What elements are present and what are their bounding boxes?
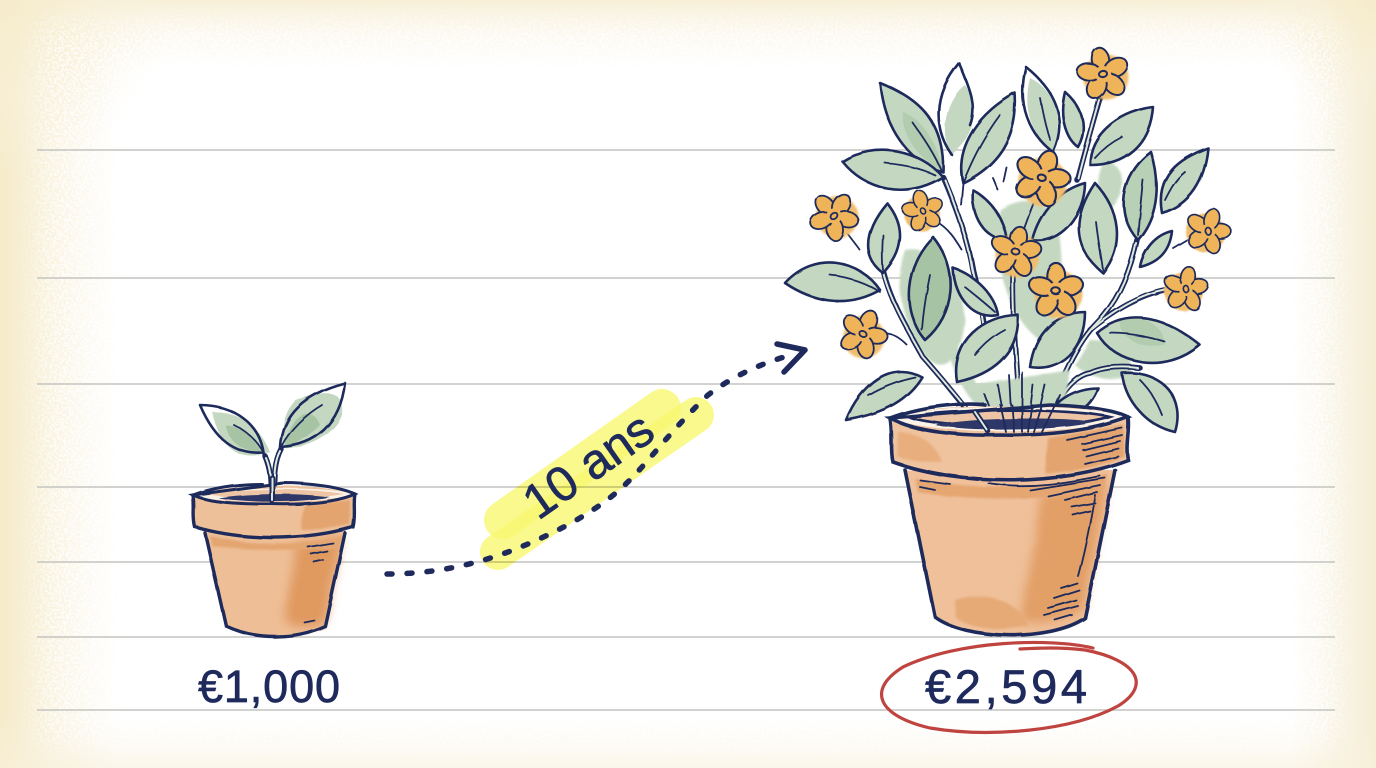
flower	[985, 222, 1047, 282]
large pot rim	[890, 404, 1128, 480]
leaf	[880, 83, 943, 172]
dotted growth arrow	[387, 344, 805, 574]
leaf	[909, 237, 951, 340]
flower	[798, 180, 870, 252]
leaf	[846, 372, 922, 420]
flower	[829, 301, 897, 367]
green wash behind plant	[900, 160, 1131, 410]
seedling stem	[265, 449, 281, 498]
large flowering plant	[785, 43, 1231, 432]
flower	[1004, 141, 1080, 215]
flower	[1159, 261, 1213, 317]
label: 10 ans: 10 ans	[513, 402, 664, 530]
amount: €2,594: €2,594	[925, 660, 1087, 713]
red hand-drawn circle	[882, 642, 1136, 732]
leaf	[953, 268, 998, 316]
plant stems entering pot	[975, 405, 1055, 432]
flower	[1071, 43, 1135, 105]
seedling left leaf	[200, 405, 270, 456]
large pot body	[904, 470, 1115, 635]
leaf	[1048, 388, 1098, 418]
seedling right leaf	[280, 383, 345, 448]
leaf	[1063, 92, 1083, 147]
leaf	[956, 315, 1018, 382]
flower	[1185, 207, 1231, 255]
leaf	[1032, 183, 1085, 241]
leaf	[1023, 67, 1059, 152]
large terracotta pot	[890, 404, 1128, 635]
notebook rule lines	[37, 150, 1335, 710]
stems	[847, 98, 1190, 427]
small pot with seedling	[193, 383, 355, 637]
leaf	[868, 203, 900, 273]
leaf	[785, 262, 880, 301]
flower	[1026, 263, 1086, 319]
leaf	[1030, 312, 1085, 368]
leaf	[1124, 152, 1157, 240]
small pot body	[203, 531, 346, 637]
leaf	[1097, 318, 1200, 363]
plant base blades	[975, 370, 1070, 432]
leaf	[1122, 373, 1178, 432]
leaf	[961, 93, 1015, 183]
amount: €1,000: €1,000	[198, 661, 340, 712]
small pot rim	[193, 478, 355, 538]
leaf	[1090, 107, 1153, 165]
flower	[894, 182, 952, 240]
highlighter behind label	[498, 408, 696, 552]
leaf	[939, 63, 974, 155]
leaf	[842, 150, 943, 190]
leaf	[973, 190, 1007, 240]
leaf	[1079, 183, 1117, 273]
leaf	[1140, 231, 1172, 267]
leaf	[1161, 148, 1208, 213]
